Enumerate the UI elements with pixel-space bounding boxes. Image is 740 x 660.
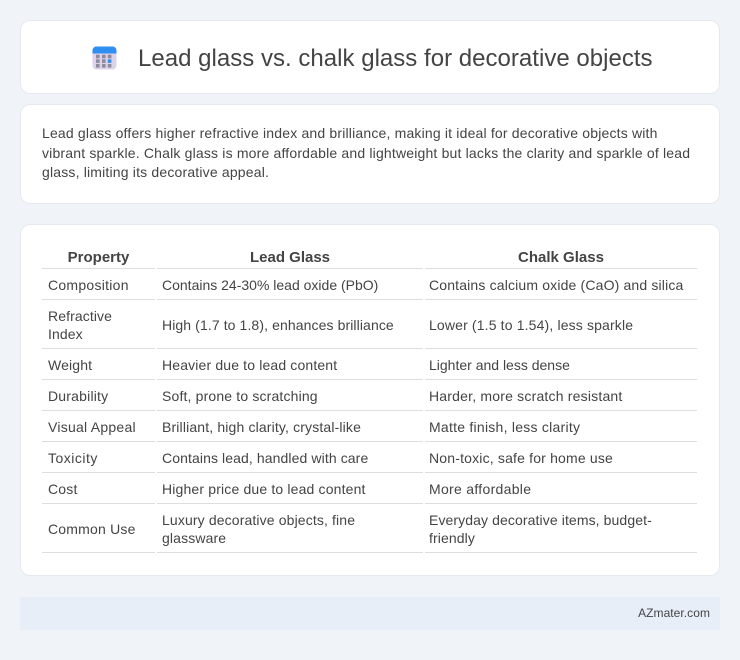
intro paragraph: glass, limiting its decorative appeal. xyxy=(42,164,269,180)
row: common use: friendly xyxy=(429,530,475,546)
row: common use: Everyday decorative items, budget- xyxy=(429,512,652,528)
row: toxicity: Non-toxic, safe for home use xyxy=(429,450,613,466)
row: visual appeal: Visual Appeal xyxy=(48,419,136,435)
row: durability: Durability xyxy=(48,388,108,404)
row: visual appeal: Matte finish, less clarity xyxy=(429,419,580,435)
icon: calendar xyxy=(92,46,116,70)
row: refractive index: Refractive xyxy=(48,308,112,324)
footer credit: AZmater.com xyxy=(638,606,710,620)
row: weight: Heavier due to lead content xyxy=(162,357,337,373)
row: composition: Contains calcium oxide (CaO) and silica xyxy=(429,277,683,293)
row: cost: More affordable xyxy=(429,481,531,497)
heading: Lead glass vs. chalk glass for decorative objects xyxy=(138,45,653,72)
row: common use: Luxury decorative objects, fine xyxy=(162,512,355,528)
intro paragraph xyxy=(42,125,690,180)
header row: Chalk Glass xyxy=(518,249,604,266)
footer bar xyxy=(20,597,720,630)
row: cost xyxy=(42,481,697,504)
comparison table xyxy=(42,249,697,553)
row: cost: Higher price due to lead content xyxy=(162,481,366,497)
row: durability: Soft, prone to scratching xyxy=(162,388,318,404)
title panel xyxy=(20,20,720,94)
row: composition xyxy=(42,277,697,300)
row: toxicity: Toxicity xyxy=(48,450,98,466)
panel: intro text xyxy=(20,104,720,204)
row: composition: Composition xyxy=(48,277,129,293)
row: cost: Cost xyxy=(48,481,78,497)
row: refractive index: Lower (1.5 to 1.54), less sparkle xyxy=(429,317,633,333)
row: common use xyxy=(42,512,697,553)
row: durability xyxy=(42,388,697,411)
row: weight: Weight xyxy=(48,357,92,373)
row: common use: glassware xyxy=(162,530,226,546)
row: common use: Common Use xyxy=(48,521,136,537)
panel: comparison table xyxy=(20,224,720,576)
row: durability: Harder, more scratch resistant xyxy=(429,388,623,404)
header row: Lead Glass xyxy=(250,249,330,266)
row: toxicity xyxy=(42,450,697,473)
row: refractive index: Index xyxy=(48,326,83,342)
row: weight xyxy=(42,357,697,380)
row: visual appeal: Brilliant, high clarity, crystal-like xyxy=(162,419,361,435)
intro paragraph: Lead glass offers higher refractive index and brilliance, making it ideal for decorative objects with xyxy=(42,125,658,141)
header row xyxy=(42,249,697,269)
row: refractive index: High (1.7 to 1.8), enhances brilliance xyxy=(162,317,394,333)
intro paragraph: vibrant sparkle. Chalk glass is more affordable and lightweight but lacks the clarity and sparkle of lead xyxy=(42,145,690,161)
header row: Property xyxy=(68,249,129,266)
row: visual appeal xyxy=(42,419,697,442)
row: refractive index xyxy=(42,308,697,349)
row: weight: Lighter and less dense xyxy=(429,357,570,373)
row: composition: Contains 24-30% lead oxide (PbO) xyxy=(162,277,378,293)
row: toxicity: Contains lead, handled with care xyxy=(162,450,368,466)
